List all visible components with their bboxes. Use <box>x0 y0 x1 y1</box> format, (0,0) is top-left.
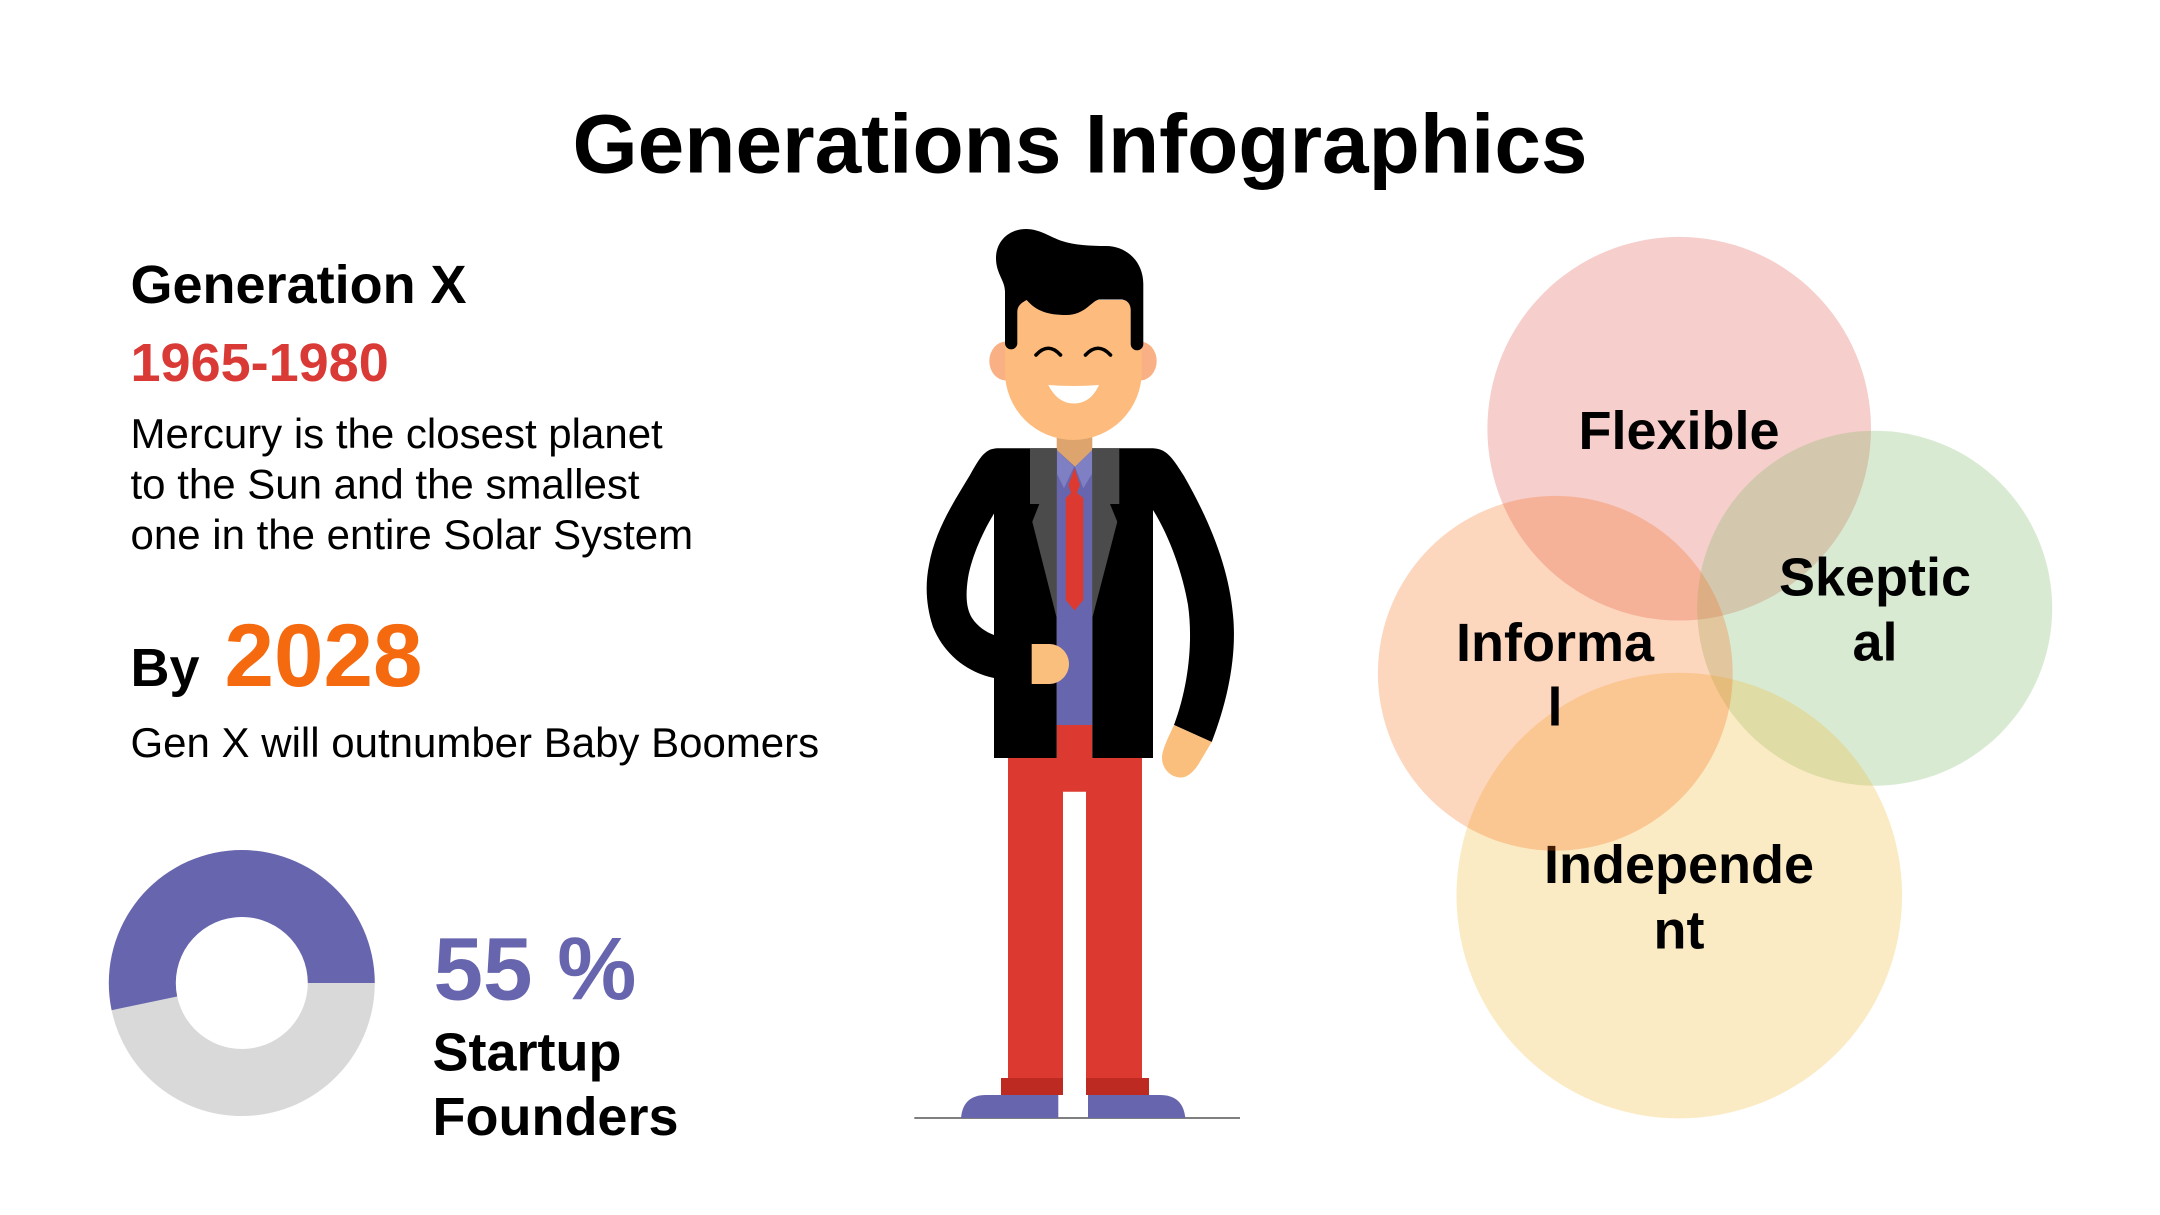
shirt collar <box>1057 450 1092 488</box>
text block: outnumber: Gen X will outnumber Baby Boomers <box>130 719 819 766</box>
text block: description: to the Sun and the smallest <box>130 460 640 508</box>
donut chart: 55 percent <box>109 850 375 1116</box>
label: independent: Independe <box>1544 835 1814 895</box>
trousers <box>1008 725 1142 1078</box>
shirt <box>1057 448 1092 725</box>
panel: trait circles <box>1378 237 2052 1118</box>
heading: generation x: Generation X <box>130 255 467 315</box>
trouser cuffs <box>1001 1078 1149 1095</box>
text block: description: one in the entire Solar System <box>130 511 693 558</box>
eyes <box>1036 348 1110 355</box>
smile <box>1048 385 1099 404</box>
panel: generation x description <box>130 255 693 558</box>
jacket lapels <box>1030 448 1119 618</box>
ground line <box>914 1117 1240 1119</box>
label: informal: l <box>1547 678 1563 738</box>
label: flexible: Flexible <box>1578 401 1780 461</box>
panel: startup founders statistic <box>432 918 679 1147</box>
label: startup founders: Startup <box>432 1022 622 1082</box>
date range: 1965-1980 <box>130 333 389 393</box>
hair <box>996 229 1143 350</box>
label: skeptical: al <box>1852 612 1898 672</box>
label: by: By <box>130 638 200 698</box>
left lapel <box>1030 448 1057 618</box>
right lapel <box>1092 448 1119 618</box>
trait: independent <box>1456 673 1902 1118</box>
right shoe <box>1088 1095 1185 1118</box>
number: 2028: 2028 <box>224 605 422 705</box>
left cuff <box>1001 1078 1063 1095</box>
jacket <box>927 448 1234 758</box>
right collar flap <box>1075 450 1092 488</box>
circle: informal <box>1378 496 1733 851</box>
donut segment: remainder <box>112 983 375 1116</box>
number: 55 percent: 55 % <box>434 918 636 1018</box>
trait: informal <box>1378 496 1733 851</box>
ears <box>989 342 1157 380</box>
left collar flap <box>1057 450 1074 488</box>
shoes <box>961 1095 1185 1118</box>
character illustration: man in suit <box>914 229 1240 1119</box>
jacket right panel and sleeve <box>1092 448 1234 758</box>
tie <box>1066 468 1083 610</box>
left shoe <box>961 1095 1058 1118</box>
label: skeptical: Skeptic <box>1779 548 1971 608</box>
panel: by 2028 statistic <box>130 605 819 766</box>
circle: flexible <box>1487 237 1871 620</box>
title: Generations Infographics <box>572 96 1588 190</box>
neck <box>1057 436 1092 467</box>
left eye <box>1036 348 1060 355</box>
donut segment: 55 percent <box>109 850 375 1010</box>
circle: independent <box>1456 673 1902 1118</box>
trait: flexible <box>1487 237 1871 620</box>
right eye <box>1086 348 1110 355</box>
trait: skeptical <box>1697 431 2052 786</box>
left hand <box>1032 644 1069 684</box>
circle: skeptical <box>1697 431 2052 786</box>
text block: description: Mercury is the closest planet <box>130 410 663 457</box>
face <box>1005 300 1142 440</box>
left ear <box>989 342 1023 380</box>
label: independent: nt <box>1654 900 1705 960</box>
label: informal: Informa <box>1456 613 1655 673</box>
right ear <box>1123 342 1157 380</box>
jacket left panel and sleeve <box>927 448 1057 758</box>
right hand <box>1162 725 1212 778</box>
right cuff <box>1086 1078 1149 1095</box>
label: startup founders: Founders <box>432 1087 679 1147</box>
